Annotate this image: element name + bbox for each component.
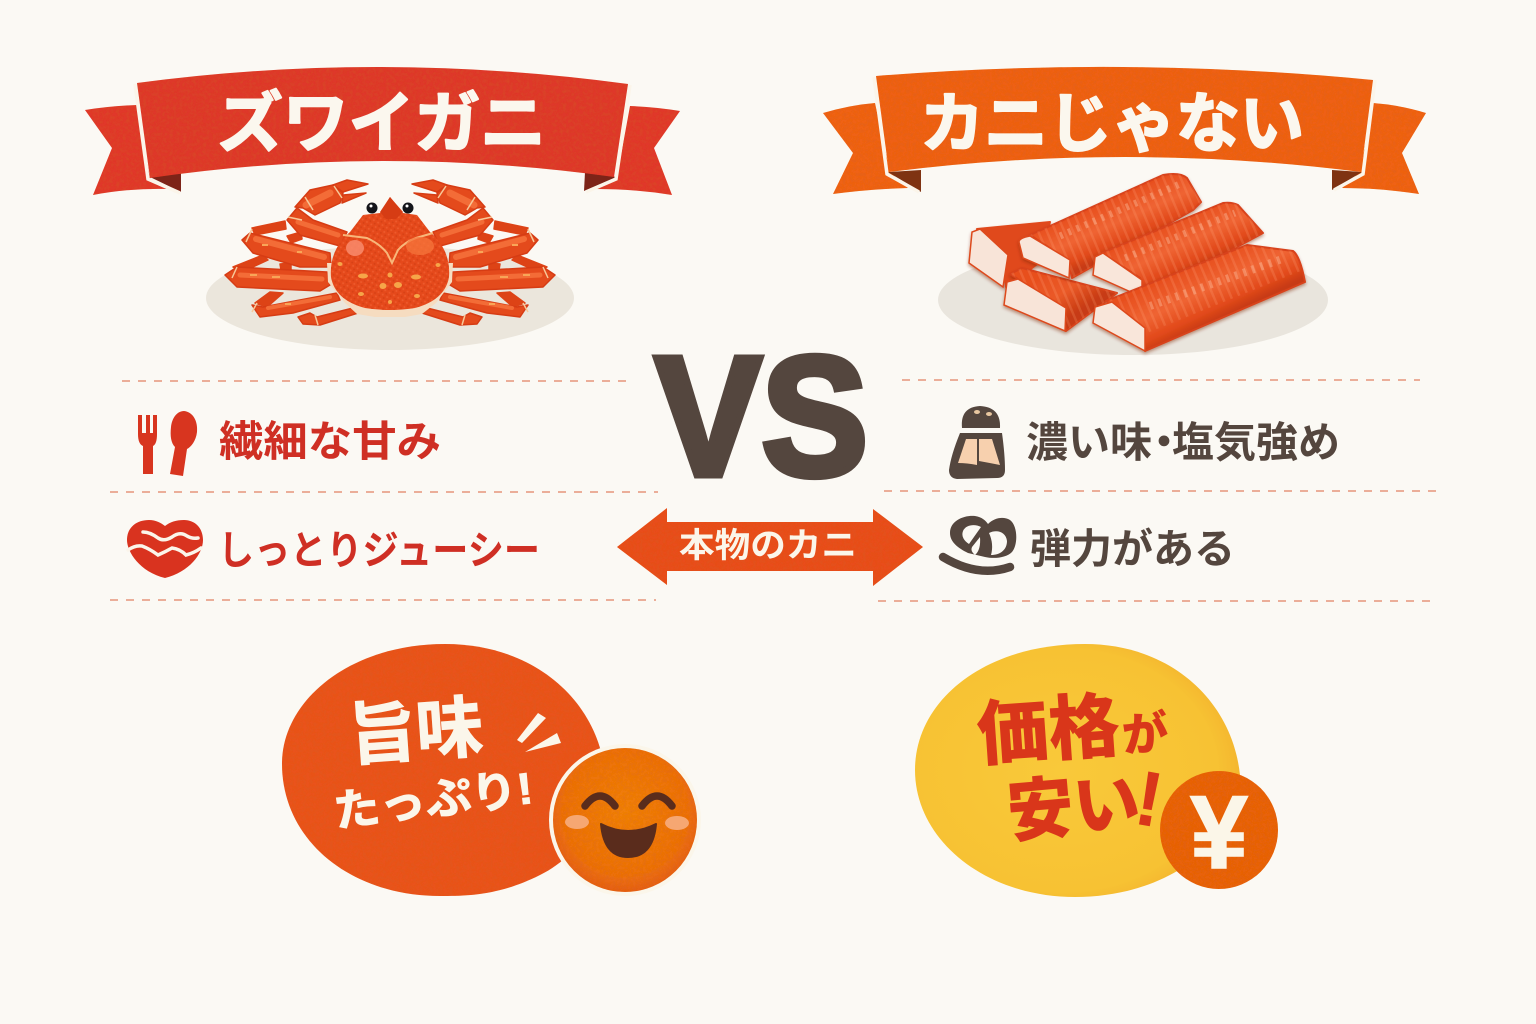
crab legs: [225, 180, 555, 325]
icon: salt shaker: [949, 406, 1005, 479]
callout text: [974, 687, 1170, 852]
plate: [206, 246, 574, 350]
feature text: strong salty taste: 濃い味: [1026, 419, 1152, 466]
callout text: 安い: [1004, 764, 1143, 852]
crab stick: back left: [969, 222, 1050, 287]
bubble: [282, 644, 603, 896]
panel: snow crab features: [127, 411, 540, 578]
callout text: !: [1129, 753, 1170, 844]
icon: pretzel: [943, 516, 1016, 571]
callout text: 旨味: [347, 689, 486, 775]
callout text: [331, 689, 535, 837]
feature text: springy texture: 弾力がある: [1030, 526, 1235, 572]
icon: fork and spoon: [138, 411, 197, 476]
crab stick: bottom left: [1004, 268, 1117, 331]
crab shell: [327, 197, 453, 317]
banner title text: ズワイガニ: [217, 86, 546, 160]
crab stick: top: [1019, 174, 1201, 278]
feature text: delicate sweetness: 繊細な甘み: [219, 418, 441, 465]
icon: yen coin: [1160, 771, 1278, 891]
emphasis marks: [517, 713, 561, 752]
VS heading: VS: [655, 322, 868, 512]
illustration: snow crab on plate: [206, 180, 574, 350]
arrow text: 本物のカニ: [679, 527, 857, 565]
plate: [938, 245, 1328, 355]
callout: full of umami: [282, 644, 701, 896]
icon: yen coin: ¥: [1190, 775, 1248, 891]
panel: snow crab header: [85, 67, 680, 350]
illustration: crab sticks on plate: [938, 174, 1328, 355]
feature text: moist and juicy: しっとりジューシー: [218, 529, 540, 573]
icon: smiling face: [549, 744, 701, 896]
feature text: strong salty taste: ・: [1143, 419, 1185, 466]
banner: ズワイガニ: [85, 67, 680, 195]
callout text: たっぷり!: [331, 764, 535, 837]
banner title text: カニじゃない: [920, 87, 1304, 160]
banner: カニじゃない: [823, 67, 1426, 194]
icon: juicy heart: [127, 520, 203, 578]
panel: imitation crab features: [943, 406, 1340, 572]
feature text: strong salty taste: 塩気強め: [1172, 419, 1340, 466]
bubble: [915, 644, 1240, 897]
panel: imitation crab header: [823, 67, 1426, 355]
crab stick: front: [1093, 245, 1305, 351]
callout text: 価格: [974, 687, 1123, 776]
crab stick: middle right: [1093, 203, 1263, 297]
callout text: が: [1120, 706, 1170, 762]
callout: low price: [915, 644, 1278, 897]
arrow: real crab label: [617, 508, 923, 586]
